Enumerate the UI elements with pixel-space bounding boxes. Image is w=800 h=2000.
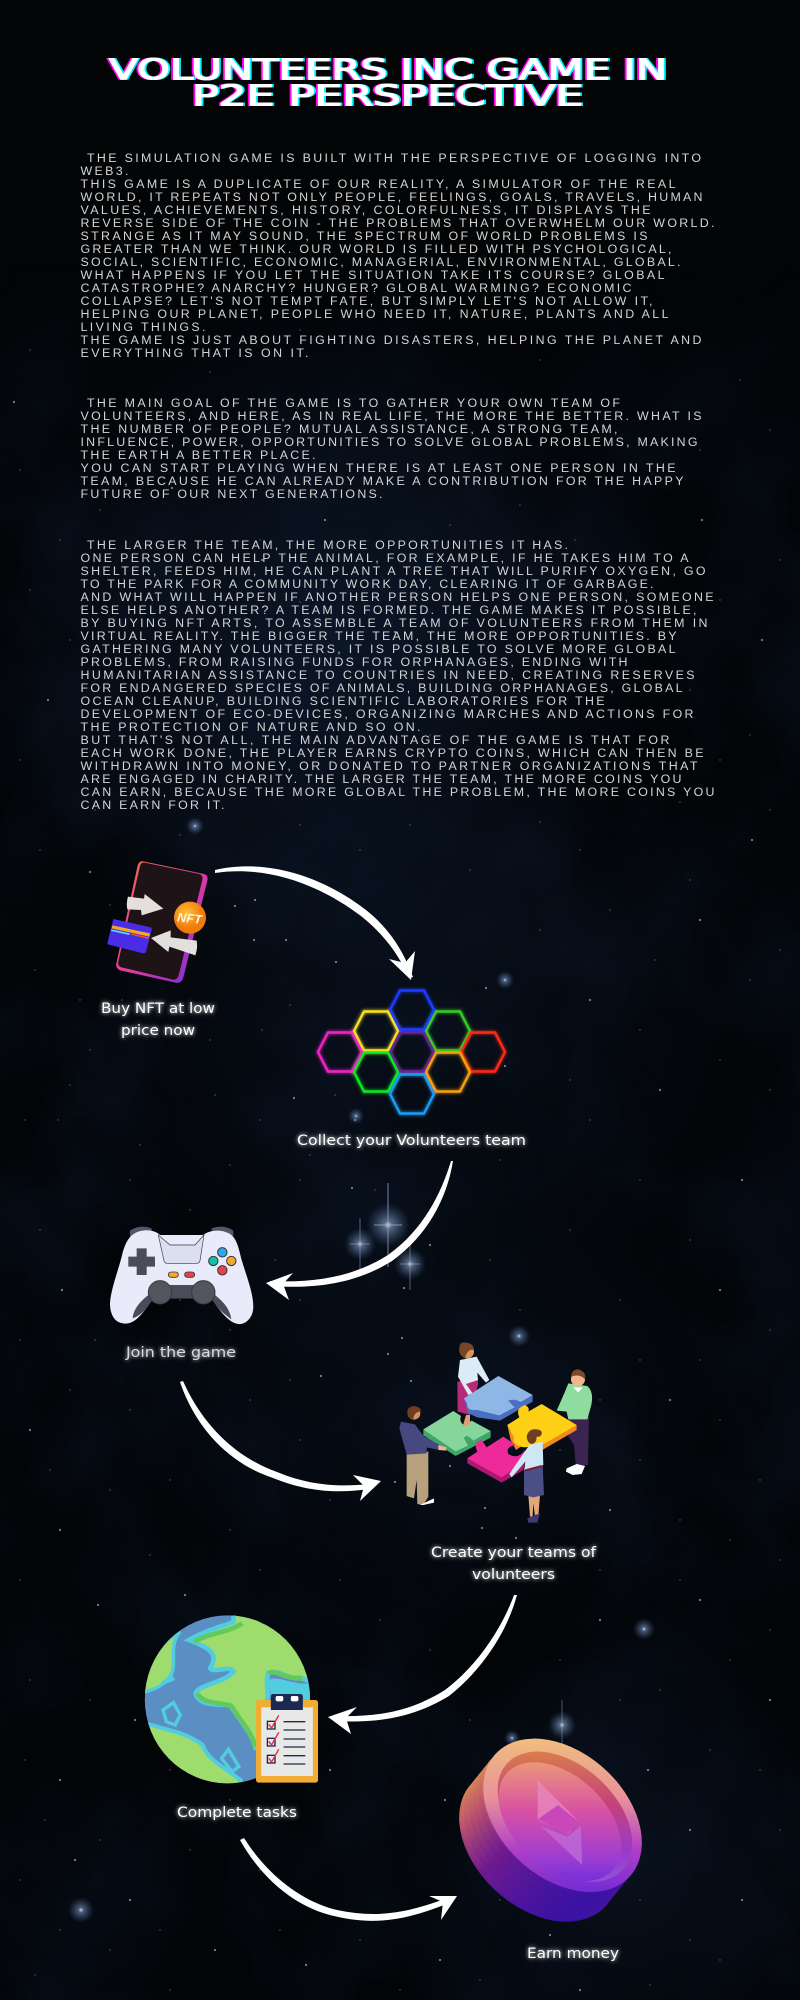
text block: simulation game intro [80,151,714,360]
text block: larger team: VIRTUAL REALITY. THE BIGGER THE TEAM, THE MORE OPPORTUNITIES. BY [80,629,676,643]
text block: main goal: THE NUMBER OF PEOPLE? MUTUAL ASSISTANCE, A STRONG TEAM, [80,422,618,436]
text block: larger team [80,538,714,812]
text block: main goal: THE MAIN GOAL OF THE GAME IS TO GATHER YOUR OWN TEAM OF [87,396,620,410]
icon: neon hexagons [318,990,505,1114]
big stars [68,817,655,1923]
puzzle piece: yellow [507,1404,577,1450]
text block: larger team: OCEAN CLEANUP, BUILDING SCIENTIFIC LABORATORIES FOR THE [80,694,604,708]
title: VOLUNTEERS INC GAME IN [109,54,667,86]
person: right man [557,1369,592,1475]
text block: main goal [80,396,701,501]
text block: simulation game intro: GREATER THAN WE THINK. OUR WORLD IS FILLED WITH PSYCHOLOGICAL, [80,242,671,256]
arrow: tasks to earn [240,1838,457,1921]
globe [144,1615,310,1784]
text block: simulation game intro: WEB3. [80,164,128,178]
label: create teams [431,1545,597,1583]
text block: simulation game intro: VALUES, ACHIEVEMENTS, HISTORY, COLORFULNESS, IT DISPLAYS THE [80,203,650,217]
text block: larger team: THE LARGER THE TEAM, THE MORE OPPORTUNITIES IT HAS. [87,538,568,552]
text block: simulation game intro: SOCIAL, SCIENTIFIC, ECONOMIC, MANAGERIAL, ENVIRONMENTAL, GLOBAL. [80,255,680,269]
text block: main goal: TEAM, BECAUSE HE CAN ALREADY MAKE A CONTRIBUTION FOR THE HAPPY [80,474,684,488]
label: create teams: volunteers [472,1567,555,1583]
icon: globe with clipboard [141,1610,318,1790]
text block: main goal: INFLUENCE, POWER, OPPORTUNITIES TO SOLVE GLOBAL PROBLEMS, MAKING [80,435,698,449]
text block: larger team: SHELTER, FEEDS HIM, HE CAN PLANT A TREE THAT WILL PURIFY OXYGEN, GO [80,564,706,578]
arrow: create to tasks [328,1595,517,1734]
label: collect team: Collect your Volunteers team [297,1133,526,1149]
text block: simulation game intro: THIS GAME IS A DUPLICATE OF OUR REALITY, A SIMULATOR OF THE REAL [80,177,676,191]
person: top woman [457,1343,489,1415]
clipboard [256,1694,318,1783]
person: front woman [509,1429,544,1523]
text block: larger team: BY BUYING NFT ARTS, TO ASSEMBLE A TEAM OF VOLUNTEERS FROM THEM IN [80,616,708,630]
icon: team assembling puzzle [399,1343,592,1523]
person: left man [399,1406,447,1505]
icon: game controller [110,1227,253,1324]
text block: larger team: THE PROTECTION OF NATURE AND SO ON. [80,720,420,734]
arrow: buy to collect [215,866,415,980]
text block: larger team: AND WHAT WILL HAPPEN IF ANOTHER PERSON HELPS ONE PERSON, SOMEONE [80,590,713,604]
text block: simulation game intro: HELPING OUR PLANET, PEOPLE WHO NEED IT, NATURE, PLANTS AND ALL [80,307,669,321]
text block: simulation game intro: COLLAPSE? LET'S NOT TEMPT FATE, BUT SIMPLY LET'S NOT ALLOW IT, [80,294,652,308]
text block: larger team: BUT THAT'S NOT ALL, THE MAIN ADVANTAGE OF THE GAME IS THAT FOR [80,733,670,747]
puzzle piece: green [423,1411,491,1456]
text block: simulation game intro: EVERYTHING THAT IS ON IT. [80,346,308,360]
text block: main goal: THE EARTH A BETTER PLACE. [80,448,316,462]
label: buy NFT: price now [121,1023,195,1039]
title: P2E PERSPECTIVE [192,80,583,112]
text block: simulation game intro: LIVING THINGS. [80,320,206,334]
text block: simulation game intro: REVERSE SIDE OF THE COIN - THE PROBLEMS THAT OVERWHELM OUR WORLD. [80,216,714,230]
text block: simulation game intro: WORLD, IT REPEATS NOT ONLY PEOPLE, FEELINGS, GOALS, TRAVELS, HUMAN [80,190,702,204]
text block: larger team: PROBLEMS, FROM RAISING FUNDS FOR ORPHANAGES, ENDING WITH [80,655,627,669]
text block: larger team: DEVELOPMENT OF ECO-DEVICES, ORGANIZING MARCHES AND ACTIONS FOR [80,707,694,721]
text block: simulation game intro: STRANGE AS IT MAY SOUND, THE SPECTRUM OF WORLD PROBLEMS IS [80,229,648,243]
text block: main goal: YOU CAN START PLAYING WHEN THERE IS AT LEAST ONE PERSON IN THE [80,461,676,475]
label: earn money: Earn money [527,1946,619,1962]
arrow: collect to join [266,1161,453,1300]
text block: larger team: GATHERING MANY VOLUNTEERS, IT IS POSSIBLE TO SOLVE MORE GLOBAL [80,642,676,656]
label: join the game: Join the game [125,1345,236,1361]
text block: simulation game intro: THE GAME IS JUST ABOUT FIGHTING DISASTERS, HELPING THE PLANET AND [80,333,702,347]
label: complete tasks: Complete tasks [177,1805,297,1821]
label: buy NFT [101,1001,215,1039]
text block: larger team: CAN EARN, BECAUSE THE MORE GLOBAL THE PROBLEM, THE MORE COINS YOU [80,785,714,799]
text block: larger team: CAN EARN FOR IT. [80,798,224,812]
arrow: join to create [180,1381,381,1501]
text block: larger team: ONE PERSON CAN HELP THE ANIMAL, FOR EXAMPLE, IF HE TAKES HIM TO A [80,551,689,565]
text block: larger team: HUMANITARIAN ASSISTANCE TO COUNTRIES IN NEED, CREATING RESERVES [80,668,694,682]
text block: larger team: EACH WORK DONE, THE PLAYER EARNS CRYPTO COINS, WHICH CAN THEN BE [80,746,704,760]
text block: simulation game intro: CATASTROPHE? ANARCHY? HUNGER? GLOBAL WARMING? ECONOMIC [80,281,632,295]
icon: NFT phone: NFT [176,910,204,927]
label: create teams: Create your teams of [431,1545,597,1561]
text block: larger team: ARE ENGAGED IN CHARITY. THE LARGER THE TEAM, THE MORE COINS YOU [80,772,682,786]
text block: larger team: FOR ENDANGERED SPECIES OF ANIMALS, BUILDING ORPHANAGES, GLOBAL [80,681,683,695]
text block: larger team: ELSE HELPS ANOTHER? A TEAM IS FORMED. THE GAME MAKES IT POSSIBLE, [80,603,696,617]
text block: larger team: WITHDRAWN INTO MONEY, OR DONATED TO PARTNER ORGANIZATIONS THAT [80,759,698,773]
label: buy NFT: Buy NFT at low [101,1001,215,1017]
title [109,54,667,112]
puzzle piece: magenta [467,1437,525,1483]
puzzle piece: blue [464,1376,533,1421]
icon: NFT phone [107,861,208,983]
text block: main goal: FUTURE OF OUR NEXT GENERATIONS. [80,487,383,501]
icon: ethereum coin [428,1709,673,1952]
text block: larger team: TO THE PARK FOR A COMMUNITY WORK DAY, CLEARING IT OF GARBAGE. [80,577,653,591]
text block: simulation game intro: WHAT HAPPENS IF YOU LET THE SITUATION TAKE ITS COURSE? GLOBAL [80,268,665,282]
text block: main goal: VOLUNTEERS, AND HERE, AS IN REAL LIFE, THE MORE THE BETTER. WHAT IS [80,409,701,423]
text block: simulation game intro: THE SIMULATION GAME IS BUILT WITH THE PERSPECTIVE OF LOGGING INTO [87,151,701,165]
